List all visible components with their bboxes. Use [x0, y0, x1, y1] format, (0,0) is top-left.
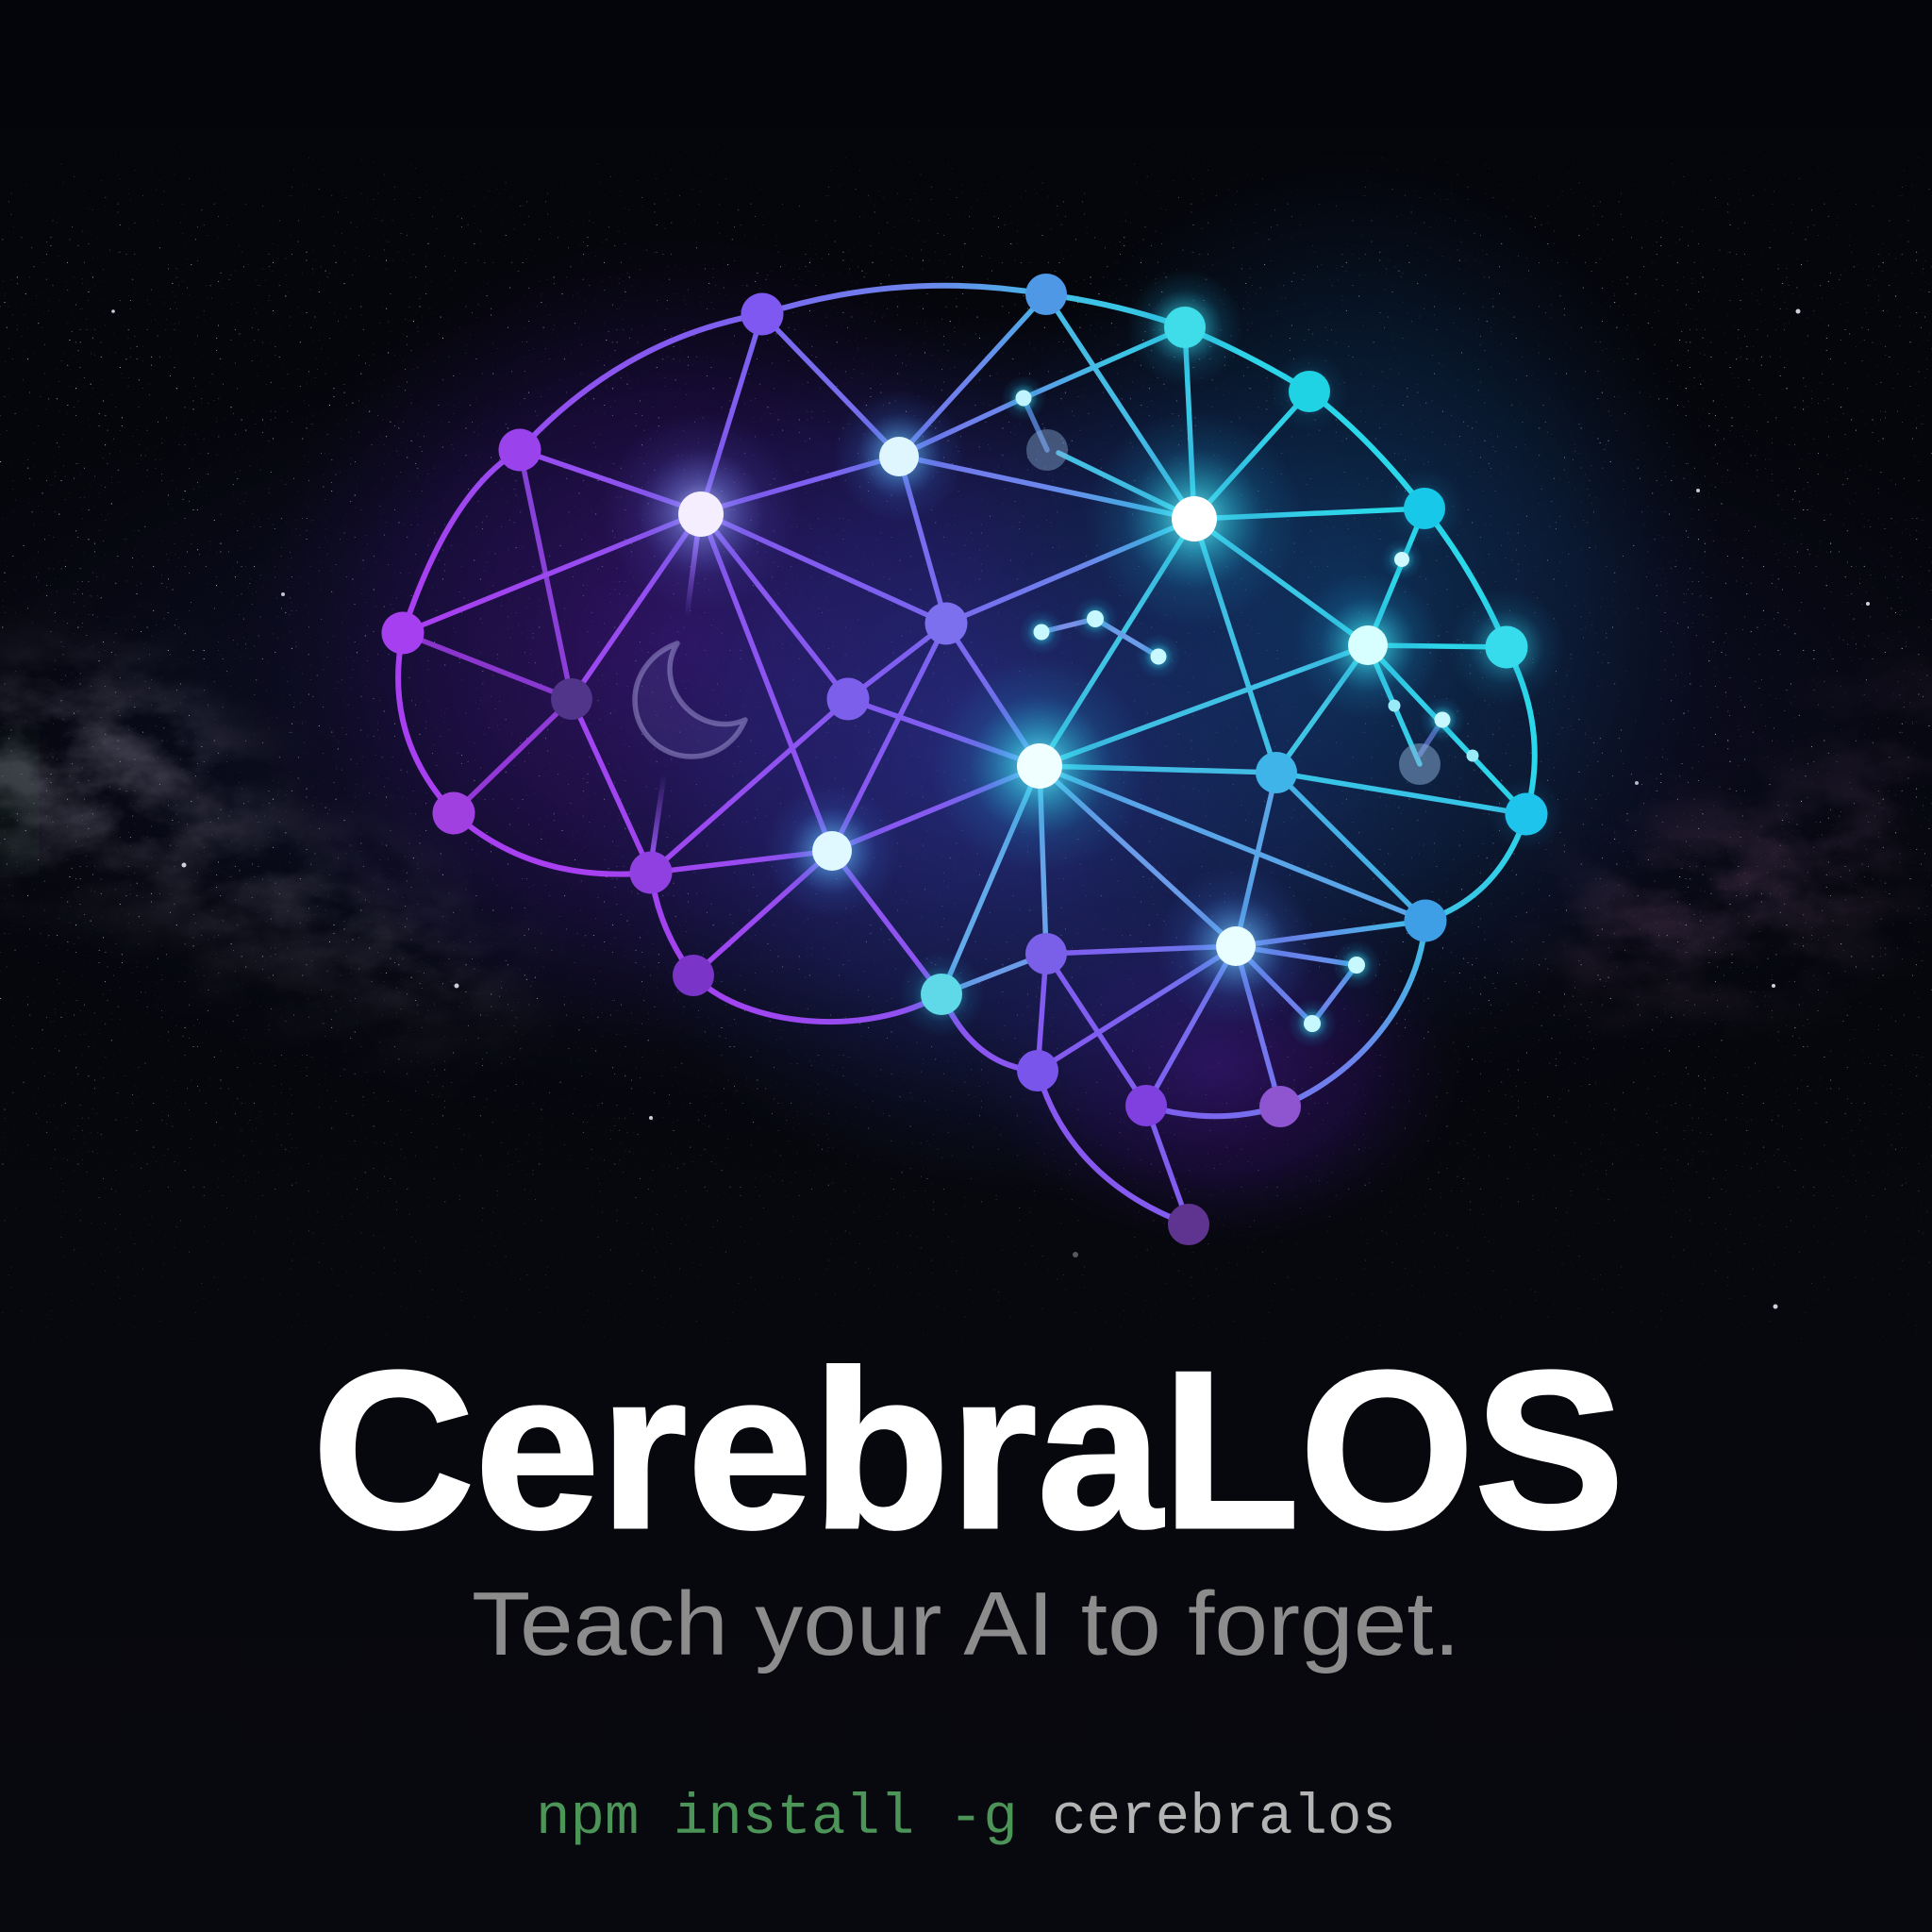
- brain outline: [398, 286, 1535, 1224]
- faded memory nodes: [1026, 429, 1441, 785]
- network edges: [403, 294, 1526, 1224]
- title: CerebraLOS: [312, 1325, 1624, 1575]
- brain network diagram: [381, 269, 1565, 1245]
- install command: npm install -g cerebralos: [536, 1787, 1396, 1851]
- outer nodes: [381, 274, 1547, 1245]
- panel: space background: [0, 147, 1932, 1368]
- inner nodes: [551, 602, 1297, 974]
- bright hub nodes: [678, 437, 1388, 966]
- tagline: Teach your AI to forget.: [472, 1574, 1460, 1674]
- node glows: [602, 269, 1565, 1048]
- icon: crescent moon: [635, 643, 745, 757]
- small memory nodes: [1015, 391, 1479, 1032]
